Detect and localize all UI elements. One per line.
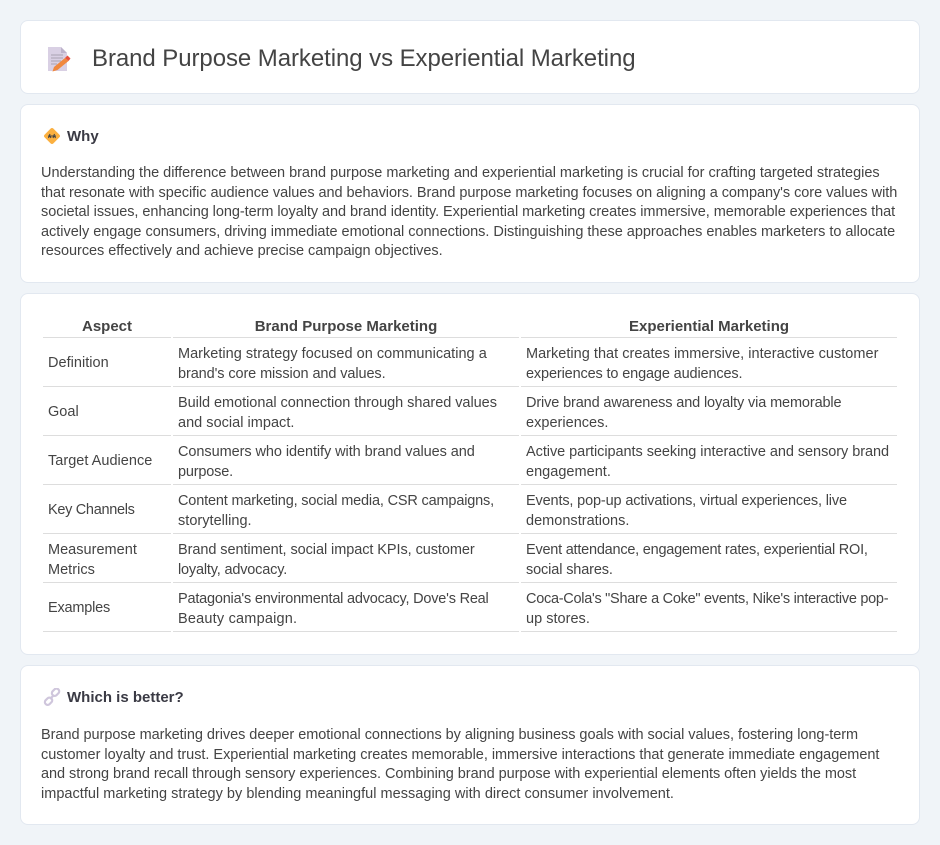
definition: experiential: Marketing that creates immersive, interactive customer: [526, 346, 878, 362]
definition: brand purpose: [178, 346, 487, 382]
target audience: brand purpose: Consumers who identify with brand values and: [178, 444, 475, 460]
key channels: experiential: [526, 493, 847, 529]
examples: experiential: up stores.: [526, 611, 590, 627]
table header: aspect: Aspect: [82, 318, 132, 335]
target audience: brand purpose: purpose.: [178, 464, 233, 480]
target audience: experiential: engagement.: [526, 464, 611, 480]
key channels: brand purpose: [178, 493, 494, 529]
icon: memo with pencil: [48, 47, 70, 72]
row: measurement metrics: [48, 542, 137, 578]
icon: chain link: [44, 688, 60, 706]
panel: title card: [20, 20, 920, 94]
row: measurement metrics: Metrics: [48, 562, 95, 578]
measurement metrics: brand purpose: loyalty, advocacy.: [178, 562, 287, 578]
text block: which is better: and strong brand recall through sensory experiences. Combining brand purpose with experiential elements often yields the most: [41, 766, 856, 782]
key channels: experiential: Events, pop-up activations, virtual experiences, live: [526, 493, 847, 509]
text block: why: Understanding the difference between brand purpose marketing and experiential marketing is crucial for crafting targeted strategies: [41, 165, 880, 181]
key channels: brand purpose: Content marketing, social media, CSR campaigns,: [178, 493, 494, 509]
target audience: experiential: Active participants seeking interactive and sensory brand: [526, 444, 889, 460]
target audience: experiential: [526, 444, 889, 480]
goal: brand purpose: [178, 395, 497, 431]
measurement metrics: experiential: social shares.: [526, 562, 613, 578]
goal: experiential: experiences.: [526, 415, 608, 431]
goal: brand purpose: Build emotional connection through shared values: [178, 395, 497, 411]
measurement metrics: experiential: [526, 542, 868, 578]
icon: warning diamond: [44, 128, 60, 144]
text block: why: [41, 165, 897, 259]
examples: brand purpose: Beauty campaign.: [178, 611, 297, 627]
heading: which is better: Which is better?: [67, 689, 184, 706]
definition: brand purpose: Marketing strategy focused on communicating a: [178, 346, 487, 362]
examples: experiential: [526, 591, 888, 627]
examples: brand purpose: Patagonia's environmental advocacy, Dove's Real: [178, 591, 489, 607]
key channels: experiential: demonstrations.: [526, 513, 629, 529]
goal: brand purpose: and social impact.: [178, 415, 294, 431]
panel: why: [20, 104, 920, 283]
measurement metrics: brand purpose: Brand sentiment, social impact KPIs, customer: [178, 542, 475, 558]
text block: which is better: Brand purpose marketing drives deeper emotional connections by aligning business goals with social values, fostering long-term: [41, 727, 858, 743]
definition: experiential: [526, 346, 878, 382]
examples: experiential: Coca-Cola's "Share a Coke" events, Nike's interactive pop-: [526, 591, 888, 607]
examples: brand purpose: [178, 591, 489, 627]
row: definition: Definition: [48, 355, 109, 371]
table header: brand purpose marketing: Brand Purpose Marketing: [255, 318, 437, 335]
heading: why: Why: [67, 128, 99, 145]
measurement metrics: brand purpose: [178, 542, 475, 578]
text block: which is better: impactful marketing strategy by blending meaningful messaging with direct consumer involvement.: [41, 786, 674, 802]
definition: brand purpose: brand's core mission and values.: [178, 366, 386, 382]
text block: why: societal issues, enhancing long-term loyalty and brand identity. Experiential marketing creates immersive, memorable experiences that: [41, 204, 895, 220]
text block: why: resources effectively and achieve precise campaign objectives.: [41, 243, 443, 259]
text block: which is better: customer loyalty and trust. Experiential marketing creates memorable, immersive interactions that generate immediate engagement: [41, 747, 879, 763]
goal: experiential: [526, 395, 841, 431]
panel: comparison table: [20, 293, 920, 655]
key channels: brand purpose: storytelling.: [178, 513, 252, 529]
text block: why: actively engage consumers, driving immediate emotional connections. Distinguishing these approaches enables marketers to allocate: [41, 224, 895, 240]
row: examples: Examples: [48, 600, 110, 616]
row: key channels: Key Channels: [48, 502, 135, 518]
row: target audience: Target Audience: [48, 453, 152, 469]
panel: which is better: [20, 665, 920, 825]
goal: experiential: Drive brand awareness and loyalty via memorable: [526, 395, 841, 411]
target audience: brand purpose: [178, 444, 475, 480]
row: goal: Goal: [48, 404, 79, 420]
definition: experiential: experiences to engage audiences.: [526, 366, 742, 382]
row: measurement metrics: Measurement: [48, 542, 137, 558]
text block: which is better: [41, 727, 880, 802]
table header: experiential marketing: Experiential Marketing: [629, 318, 789, 335]
measurement metrics: experiential: Event attendance, engagement rates, experiential ROI,: [526, 542, 868, 558]
title: Brand Purpose Marketing vs Experiential Marketing: [92, 45, 636, 72]
text block: why: that resonate with specific audience values and behaviors. Brand purpose marketing focuses on aligning a company's core values with: [41, 185, 897, 201]
